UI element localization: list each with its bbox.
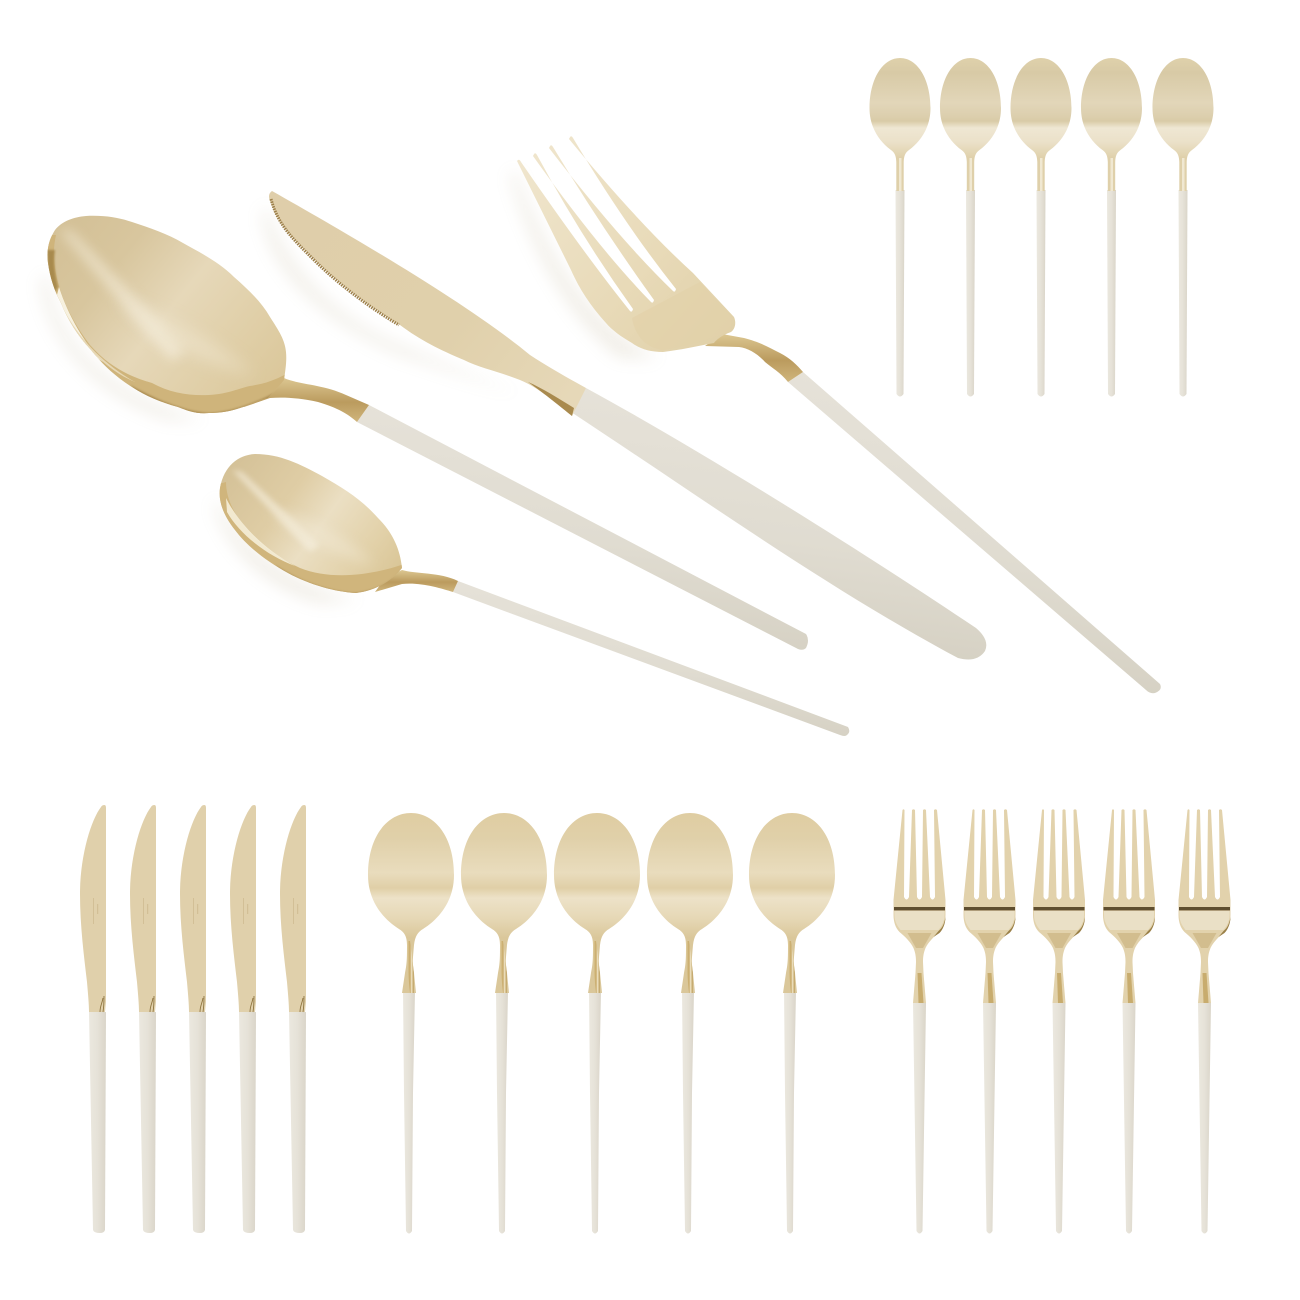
neck [375,570,458,592]
knife 3 [180,805,206,1233]
spoon 1 [368,813,454,1234]
neck [705,334,803,382]
coffee spoon 1 [870,58,930,396]
handle [571,388,986,659]
bowl [220,454,402,593]
small teaspoon [215,450,849,736]
bowl [40,210,290,420]
fork 2 [964,809,1016,1234]
large serving spoon [40,210,808,650]
row: five dessert spoons [368,813,835,1234]
row: five coffee spoons [870,58,1214,396]
fork 3 [1033,809,1085,1234]
soft shadows [40,170,660,603]
spoon 3 [554,813,640,1234]
knife 1 [80,805,106,1233]
handle [453,581,849,736]
knife 2 [130,805,156,1233]
large dinner knife [269,191,986,659]
coffee spoon 2 [940,58,1001,396]
coffee spoon 4 [1081,58,1142,396]
knife 4 [230,805,256,1233]
fork bowl shade [632,282,732,350]
blade heel shading [528,382,574,416]
coffee spoon 5 [1152,58,1214,396]
serration [271,199,399,325]
spoon 2 [461,813,547,1234]
spoon 4 [647,813,733,1234]
row: five table knives [80,805,306,1233]
coffee spoon 3 [1010,58,1072,396]
fork 1 [894,809,946,1234]
fork 5 [1178,809,1230,1234]
neck [244,378,369,422]
knife 5 [280,805,306,1233]
spoon 5 [749,813,835,1234]
blade [269,191,586,416]
fork 4 [1103,809,1155,1234]
large dinner fork [517,136,1161,693]
head and tines [517,136,735,352]
handle [357,405,808,650]
row: five forks [894,809,1230,1234]
handle [788,372,1161,693]
